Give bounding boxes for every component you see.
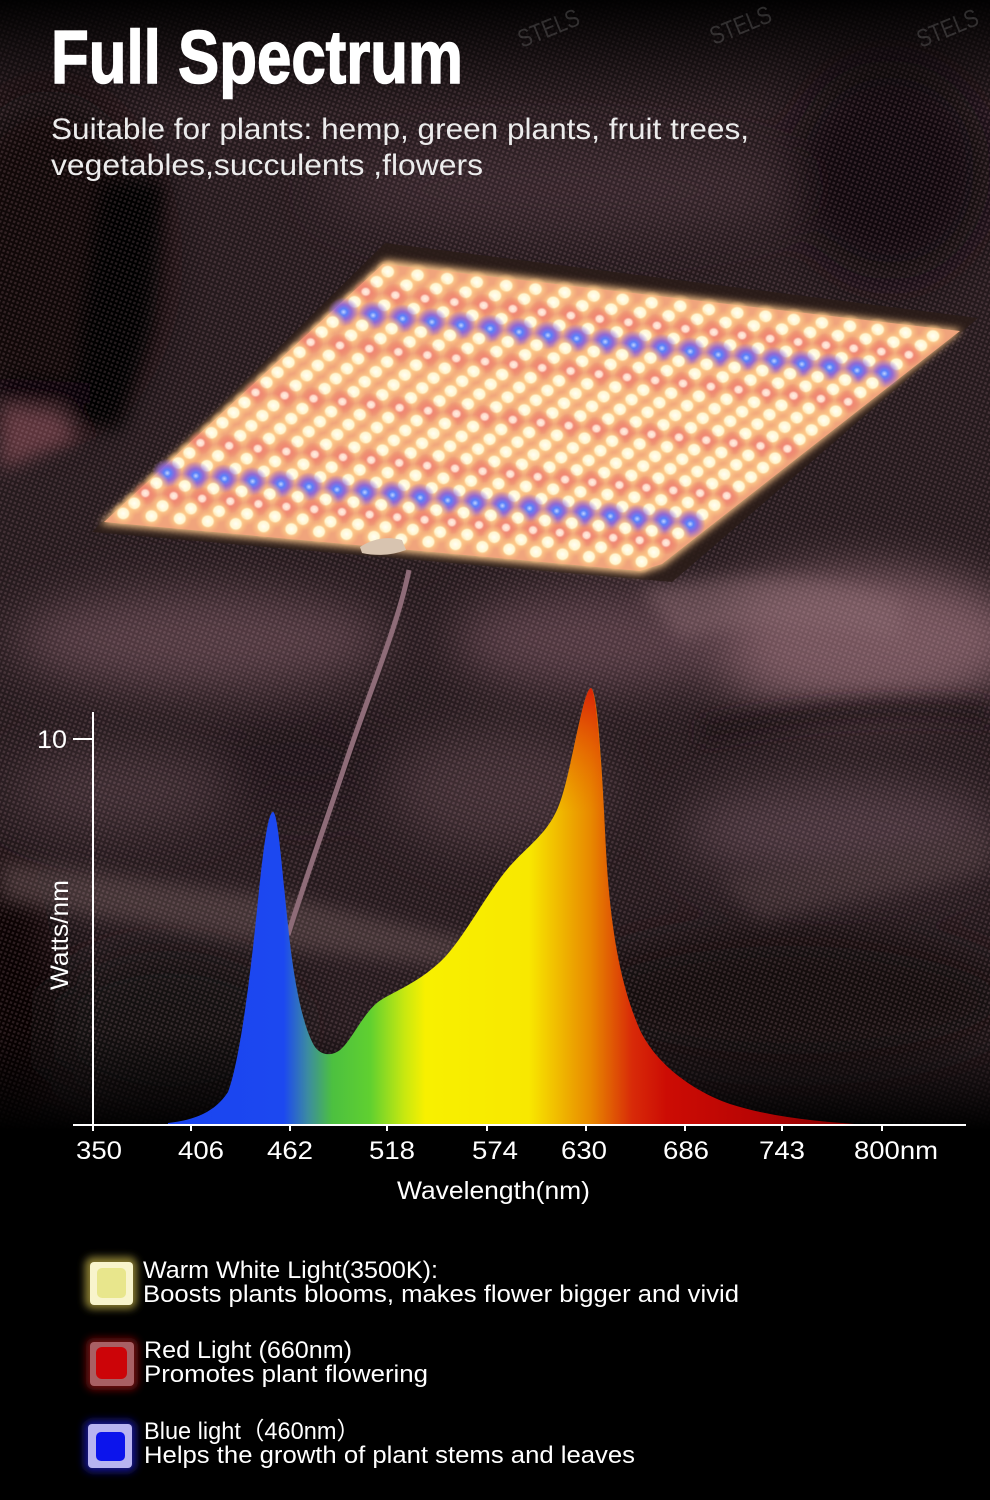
x axis label: Wavelength(nm) (397, 1177, 590, 1205)
x axis values: 686 (663, 1137, 709, 1165)
legend text: blue: Blue light（460nm） (144, 1418, 360, 1445)
icon: warm white LED (85, 1257, 137, 1309)
x axis values: 350 (76, 1137, 122, 1165)
x axis values (76, 1137, 938, 1165)
legend text: blue: Helps the growth of plant stems and leaves (144, 1442, 635, 1469)
legend (84, 1257, 739, 1472)
icon: red LED (86, 1338, 138, 1390)
title: Full Spectrum (51, 15, 463, 99)
LED rows (110, 258, 948, 575)
axes (73, 712, 966, 1131)
x axis values: 406 (178, 1137, 224, 1165)
y axis value: 10 (37, 726, 67, 754)
x axis values: 518 (369, 1137, 415, 1165)
x axis values: 462 (267, 1137, 313, 1165)
x axis values: 743 (759, 1137, 805, 1165)
panel lit surface (100, 260, 962, 574)
legend text: warm white: Warm White Light(3500K): (143, 1257, 438, 1284)
legend text: blue (144, 1418, 635, 1469)
legend text: red: Red Light (660nm) (144, 1337, 352, 1364)
red tint on tallest peak (556, 688, 604, 812)
x axis values: 574 (472, 1137, 518, 1165)
watermarks (514, 1, 983, 54)
subtitle text: vegetables,succulents ,flowers (51, 149, 483, 182)
legend text: warm white: Boosts plants blooms, makes flower bigger and vivid (143, 1281, 739, 1308)
panel mounting clip (360, 538, 406, 555)
spectrum chart (37, 688, 966, 1205)
y axis label: Watts/nm (46, 880, 74, 990)
subtitle text: Suitable for plants: hemp, green plants, fruit trees, (51, 113, 749, 146)
cable (288, 570, 409, 935)
spectrum curve (168, 688, 870, 1125)
icon: blue LED (84, 1420, 136, 1472)
legend text: red: Promotes plant flowering (144, 1361, 428, 1388)
legend text: warm white (143, 1257, 739, 1308)
legend text: red (144, 1337, 428, 1388)
x axis values: 800nm (854, 1137, 938, 1165)
LED grow light panel (92, 243, 978, 582)
panel frame (92, 243, 978, 582)
x axis values: 630 (561, 1137, 607, 1165)
subtitle text (51, 113, 749, 182)
